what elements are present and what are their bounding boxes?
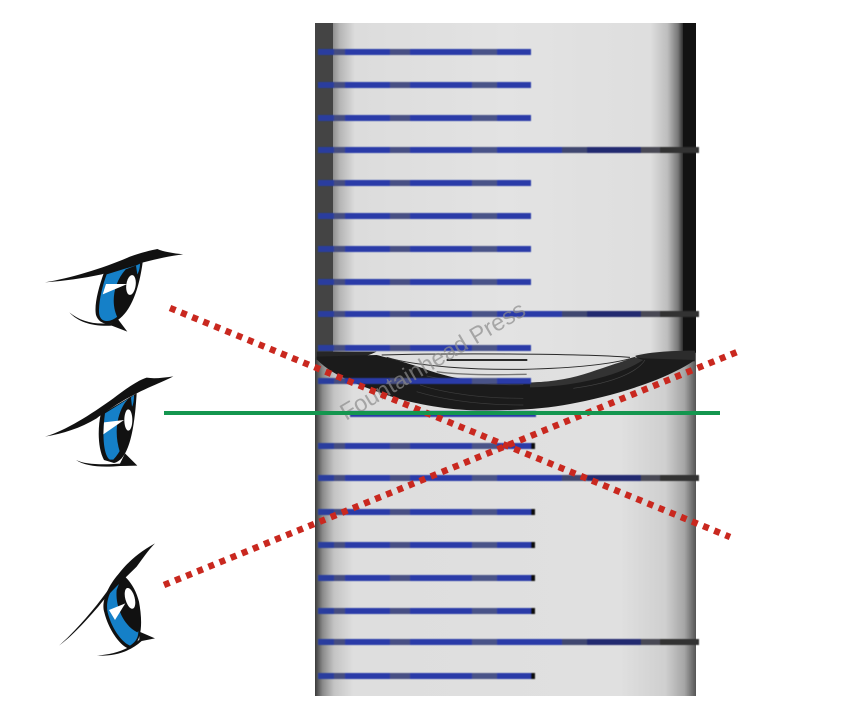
icon: eye looking level bbox=[45, 376, 173, 467]
sight line: too high bbox=[170, 308, 730, 537]
watermark: Fountainhead Press bbox=[335, 296, 530, 425]
cylinder lower body below the liquid bbox=[315, 352, 696, 696]
sight line: too low bbox=[164, 352, 737, 585]
sight line: level bbox=[164, 411, 720, 415]
meniscus bbox=[317, 351, 695, 410]
icon: eye looking down bbox=[45, 249, 183, 332]
graduation marks above the meniscus bbox=[318, 49, 699, 351]
graduated cylinder bbox=[315, 23, 699, 696]
graduation marks below the meniscus bbox=[318, 378, 699, 679]
cylinder upper body above the liquid bbox=[315, 23, 696, 358]
icon: eye looking up bbox=[59, 543, 155, 656]
